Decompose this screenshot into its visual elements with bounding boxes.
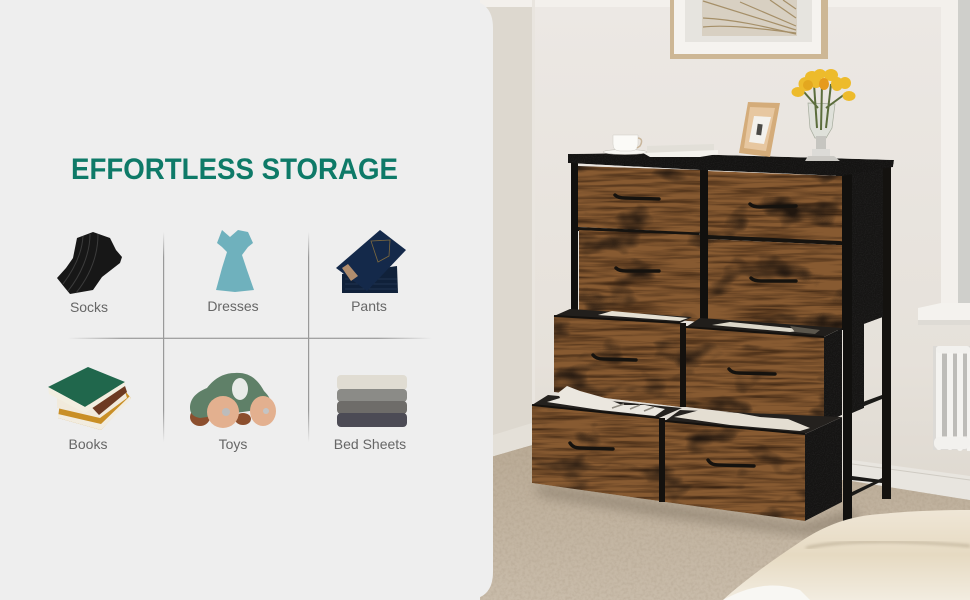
frame posts (571, 160, 852, 521)
drawer: top left (578, 166, 700, 233)
label: Pants (351, 298, 387, 314)
title: EFFORTLESS STORAGE (71, 153, 398, 186)
baseboards (493, 423, 970, 500)
icon: book stack (48, 367, 131, 430)
back legs and side rails (852, 165, 891, 499)
left panel (0, 0, 493, 600)
label: Bed Sheets (334, 436, 406, 452)
dresser (532, 153, 894, 535)
label: Books (69, 436, 107, 452)
item: toys (190, 373, 276, 452)
folded clothes (547, 386, 665, 416)
flower vase (792, 69, 856, 161)
photo frame (739, 102, 780, 157)
icon: toy car (190, 373, 276, 428)
open drawer: third left (554, 309, 692, 407)
side fabric panel (850, 168, 883, 414)
open drawer: bottom right (665, 410, 842, 521)
coffee cup and saucer (603, 135, 647, 154)
drawer: top right (708, 171, 842, 242)
item: socks (57, 232, 122, 315)
icon: folded sheets (337, 375, 407, 427)
icon: jeans (336, 230, 406, 293)
window (918, 0, 970, 325)
drawer: second right (708, 239, 842, 330)
label: Dresses (207, 298, 259, 314)
stacked books on dresser (643, 144, 718, 157)
label: Socks (70, 299, 108, 315)
room background (480, 0, 970, 600)
wall picture frame (670, 0, 828, 59)
folded clothes (674, 410, 810, 431)
item: bed sheets (334, 375, 407, 452)
floor shadow (535, 485, 860, 535)
category grid (48, 230, 432, 452)
open drawer: bottom left (532, 386, 682, 502)
dresser top (568, 153, 894, 176)
drawer: second left (579, 230, 700, 322)
icon: dress (216, 230, 254, 292)
item: books (48, 367, 131, 452)
item: pants (336, 230, 406, 314)
icon: socks (57, 232, 122, 294)
front leg foreground (843, 330, 852, 521)
label: Toys (219, 436, 247, 452)
open drawer: third right (686, 318, 842, 423)
radiator (933, 346, 970, 451)
bed (723, 510, 970, 600)
item: dresses (207, 230, 259, 314)
carpet floor (480, 445, 970, 600)
